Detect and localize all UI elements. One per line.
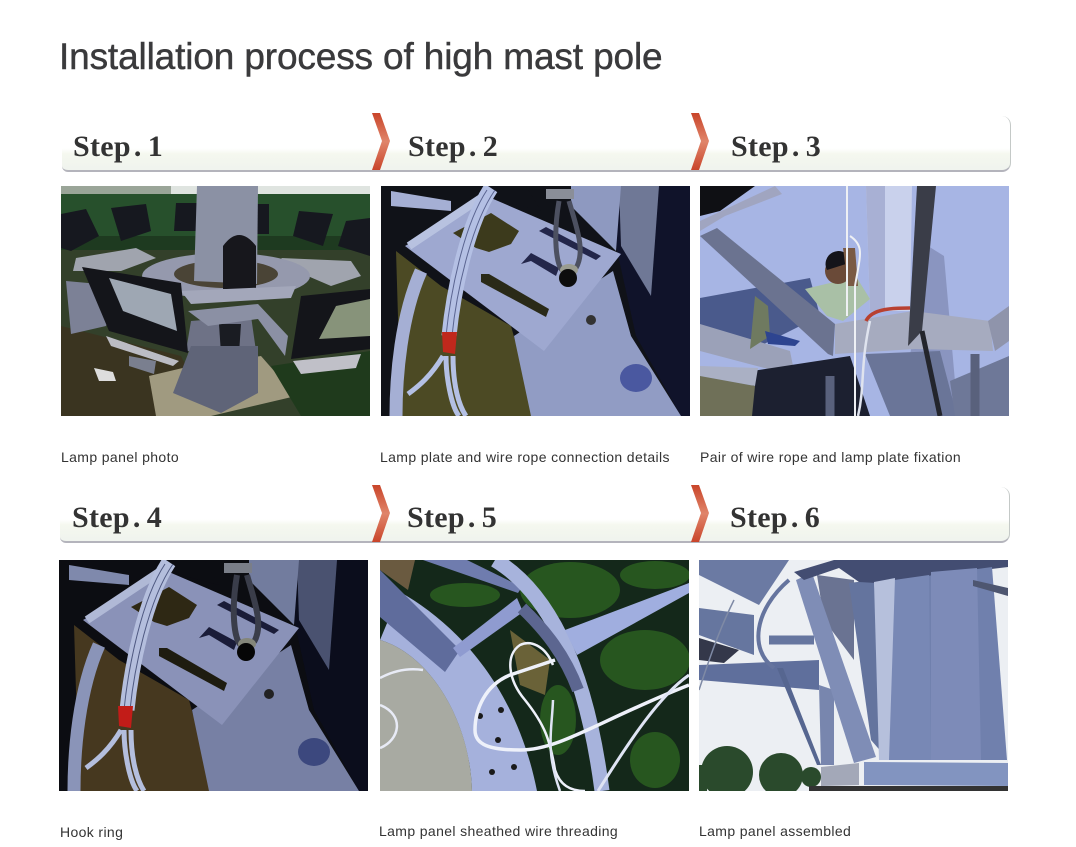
arrow: step 4 to 5: [372, 485, 390, 542]
step bar row 2: [60, 487, 1010, 543]
step bar row 1: [62, 116, 1011, 172]
caption 3: Pair of wire rope and lamp plate fixation: [700, 449, 961, 465]
caption 2: Lamp plate and wire rope connection details: [380, 449, 670, 465]
photo: wire rope fixation: [700, 186, 1009, 416]
arrow: step 2 to 3: [691, 113, 709, 170]
arrow: step 1 to 2: [372, 113, 390, 170]
caption 5: Lamp panel sheathed wire threading: [379, 823, 618, 839]
step 6 label: Step.6: [730, 501, 820, 534]
step 5 label: Step.5: [407, 501, 497, 534]
caption 1: Lamp panel photo: [61, 449, 179, 465]
photo: sheathed wire threading: [380, 560, 689, 791]
photo: lamp panel: [61, 186, 370, 416]
arrow: step 5 to 6: [691, 485, 709, 542]
photo: lamp panel assembled: [699, 560, 1008, 791]
step 2 label: Step.2: [408, 130, 498, 163]
photo: hook ring: [59, 560, 368, 791]
caption 6: Lamp panel assembled: [699, 823, 851, 839]
step 3 label: Step.3: [731, 130, 821, 163]
step 4 label: Step.4: [72, 501, 162, 534]
caption 4: Hook ring: [60, 824, 123, 840]
title: Installation process of high mast pole: [59, 36, 662, 77]
photo: wire rope connection: [381, 186, 690, 416]
step 1 label: Step.1: [73, 130, 163, 163]
